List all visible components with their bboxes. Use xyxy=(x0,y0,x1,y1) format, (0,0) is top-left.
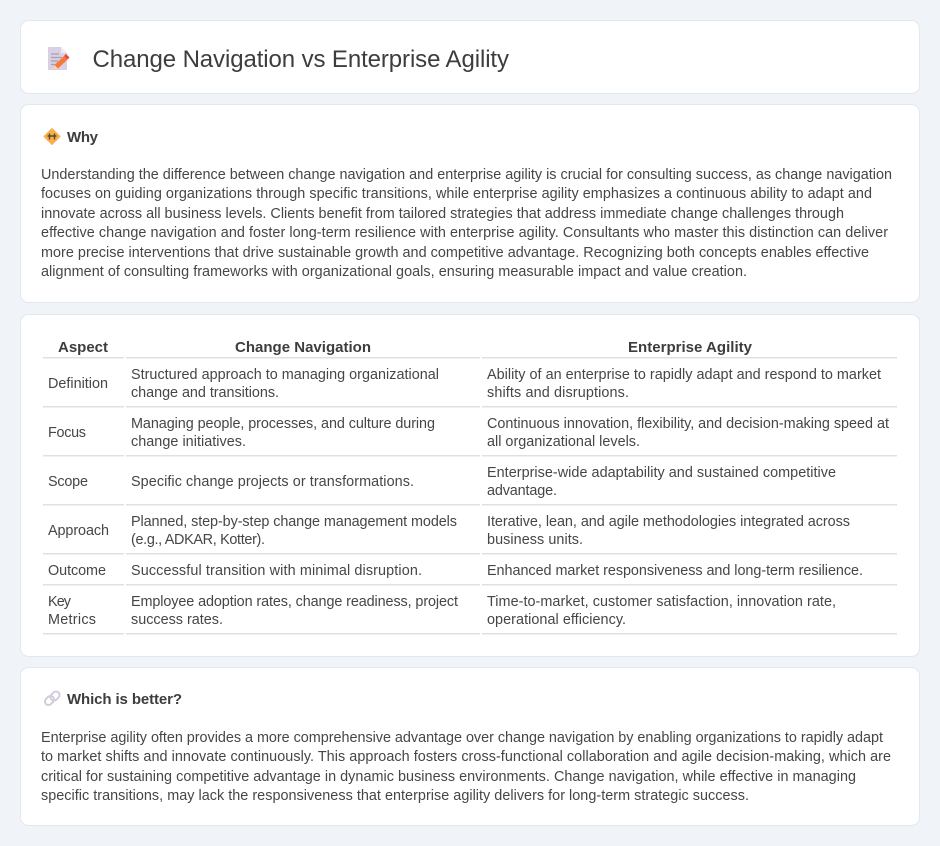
text block: which is better paragraph: critical for sustaining competitive advantage in dynamic business environments. Change navigation, while effective in managing xyxy=(41,769,856,785)
table row: outcome xyxy=(43,563,897,586)
table row: key metrics: operational efficiency. xyxy=(487,612,626,628)
table row: definition: Definition xyxy=(48,376,108,392)
icon: warning diamond xyxy=(44,128,60,144)
table row: definition: Ability of an enterprise to rapidly adapt and respond to market xyxy=(487,367,881,383)
table row: focus: Continuous innovation, flexibility, and decision-making speed at xyxy=(487,416,889,432)
table row: definition: change and transitions. xyxy=(131,385,279,401)
table row: definition: shifts and disruptions. xyxy=(487,385,629,401)
text block: why paragraph: focuses on guiding organizations through specific transitions, while enterprise agility emphasizes a continuous ability to adapt and xyxy=(41,186,872,202)
table row: approach xyxy=(43,514,897,554)
table row: key metrics: success rates. xyxy=(131,612,223,628)
table row: focus xyxy=(43,416,897,456)
table row: scope: Enterprise-wide adaptability and sustained competitive xyxy=(487,465,836,481)
text block: which is better paragraph: specific transitions, may lack the responsiveness that enterprise agility delivers for long-term strategic success. xyxy=(41,788,749,804)
table row: key metrics xyxy=(43,594,897,634)
table row: key metrics: Key xyxy=(48,594,72,610)
panel: which is better xyxy=(20,668,920,826)
table row: key metrics: Metrics xyxy=(48,612,96,628)
text block: which is better paragraph xyxy=(41,730,891,804)
text block: why paragraph: innovate across all business levels. Clients benefit from tailored strategies that address immediate change challenges through xyxy=(41,206,844,222)
text block: why paragraph: alignment of consulting frameworks with organizational goals, ensuring measurable impact and value creation. xyxy=(41,264,747,280)
text block: why paragraph: Understanding the difference between change navigation and enterprise agility is crucial for consulting success, as change navigation xyxy=(41,167,892,183)
table row: approach: business units. xyxy=(487,532,583,548)
title: Change Navigation vs Enterprise Agility xyxy=(92,46,509,73)
icon: document with pencil xyxy=(48,47,70,70)
table header row xyxy=(43,339,897,358)
text block: why paragraph: more precise interventions that drive sustainable growth and competitive advantage. Recognizing both concepts enables effective xyxy=(41,245,869,261)
table row: scope: Specific change projects or transformations. xyxy=(131,474,414,490)
table header row: Change Navigation xyxy=(235,339,371,356)
text block: which is better paragraph: to market shifts and innovate continuously. This approach fosters cross-functional collaboration and agile decision-making, which are xyxy=(41,749,891,765)
table row: outcome: Outcome xyxy=(48,563,106,579)
text block: why paragraph xyxy=(41,167,892,280)
text block: why paragraph: effective change navigation and foster long-term resilience with enterprise agility. Consultants who master this distinction can deliver xyxy=(41,225,888,241)
panel: why xyxy=(20,104,920,302)
table header row: Enterprise Agility xyxy=(628,339,753,356)
heading: which is better: Which is better? xyxy=(67,691,182,708)
table row: approach: Iterative, lean, and agile methodologies integrated across xyxy=(487,514,850,530)
table row: key metrics: Employee adoption rates, change readiness, project xyxy=(131,594,458,610)
table row: key metrics: Time-to-market, customer satisfaction, innovation rate, xyxy=(487,594,836,610)
panel: comparison table xyxy=(20,314,920,656)
table row: approach: (e.g., ADKAR, Kotter). xyxy=(131,532,265,548)
panel: header xyxy=(20,20,920,94)
table row: definition: Structured approach to managing organizational xyxy=(131,367,439,383)
table row: outcome: Successful transition with minimal disruption. xyxy=(131,563,422,579)
table row: approach: Approach xyxy=(48,523,109,539)
table row: focus: all organizational levels. xyxy=(487,434,640,450)
table row: focus: Managing people, processes, and culture during xyxy=(131,416,435,432)
icon: chain link xyxy=(43,690,61,707)
table row: scope: Scope xyxy=(48,474,88,490)
table row: focus: Focus xyxy=(48,425,86,441)
text block: which is better paragraph: Enterprise agility often provides a more comprehensive advantage over change navigation by enabling organizations to rapidly adapt xyxy=(41,730,883,746)
table row: definition xyxy=(43,367,897,408)
table row: outcome: Enhanced market responsiveness and long-term resilience. xyxy=(487,563,863,579)
table row: focus: change initiatives. xyxy=(131,434,246,450)
table header row: Aspect xyxy=(58,339,108,356)
table row: scope: advantage. xyxy=(487,483,557,499)
table row: scope xyxy=(43,465,897,506)
table row: approach: Planned, step-by-step change management models xyxy=(131,514,457,530)
heading: why: Why xyxy=(67,129,99,146)
